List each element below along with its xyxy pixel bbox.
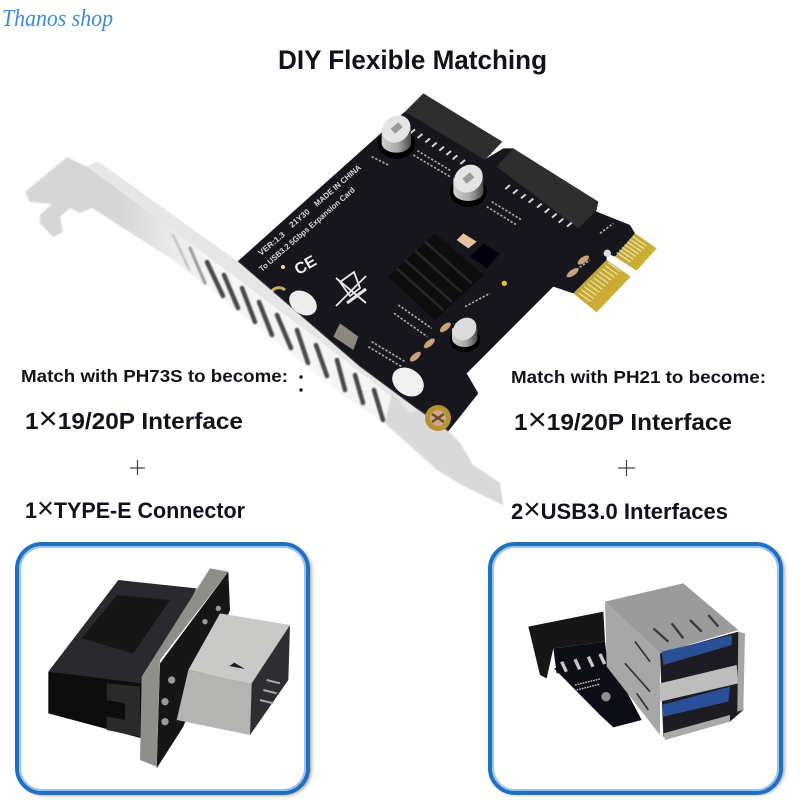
board silkscreen: [575, 679, 600, 690]
panel frame: [17, 544, 308, 793]
chip and gold component: [457, 233, 611, 286]
bracket folded top strip: [87, 162, 418, 413]
header connector 2: [497, 148, 598, 228]
housing front: [48, 672, 142, 738]
header pins: [562, 654, 605, 672]
cage top: [605, 583, 738, 653]
shell pins: [260, 680, 280, 703]
housing notch: [107, 683, 140, 737]
right line 2: 2×USB3.0 Interfaces: [511, 493, 728, 526]
board silkscreen text: MADE IN CHINA: [312, 163, 363, 209]
port front: [660, 632, 743, 737]
silkscreen pads: [368, 151, 613, 367]
bottom flange: [663, 715, 730, 740]
pin backing: [553, 642, 608, 673]
header housing: [528, 612, 605, 678]
expansion card product photo: [25, 93, 657, 505]
capacitor 3: [448, 313, 481, 352]
left line 1: 1×19/20P Interface: [25, 401, 243, 436]
panel inner highlight: [493, 547, 778, 790]
metal shell top: [188, 613, 290, 683]
board silkscreen text: 21Y30: [288, 207, 312, 230]
plate black face: [157, 572, 230, 768]
lower capacitors: [284, 285, 429, 402]
watermark: Thanos shop: Thanos shop: [2, 6, 113, 32]
header connector 1: [405, 93, 502, 164]
left column heading: Match with PH73S to become:: [21, 366, 288, 386]
shell opening: [250, 625, 290, 735]
right plus: [618, 460, 635, 476]
left plus: [130, 460, 145, 475]
board silkscreen text: VER:1.3: [257, 230, 287, 258]
middle silver bar: [660, 665, 738, 702]
right column heading: Match with PH21 to become:: [511, 367, 766, 387]
Type-E connector: [48, 568, 290, 768]
housing recess: [82, 595, 170, 653]
colon dots: [299, 375, 303, 392]
panel frame: [490, 544, 781, 793]
lower USB tongue: [662, 687, 730, 717]
metal shell front: [177, 670, 252, 735]
USB3.0 connector: [528, 583, 745, 740]
board silkscreen text: CE: [292, 253, 320, 279]
board silkscreen text: To USB3.2 5Gbps Expansion Card: [257, 185, 357, 274]
right line 1: 1×19/20P Interface: [514, 402, 732, 437]
upper USB tongue: [662, 635, 732, 665]
panel inner top shadow: [36, 548, 290, 552]
circuit board: [237, 93, 657, 433]
panel inner top shadow: [510, 548, 762, 552]
bracket tail: [385, 392, 503, 505]
cage spring clips: [653, 615, 718, 642]
capacitor 1: [377, 110, 416, 159]
gold fingers: long segment: [573, 260, 631, 312]
bracket body: [25, 157, 503, 505]
tan resistors: [408, 254, 591, 363]
PCB outline: [237, 112, 635, 433]
left line 2: 1×TYPE-E Connector: [25, 492, 245, 525]
panel: Type-E connector photo: [17, 544, 311, 795]
board hole: [601, 692, 611, 701]
grey inductor block: [333, 323, 358, 350]
arrow mark: [229, 663, 245, 669]
plate grey edge: [140, 568, 228, 767]
gold fingers: short segment: [615, 233, 657, 271]
cage side slots: [625, 642, 650, 710]
cage side: [605, 602, 660, 735]
metal bracket: [25, 157, 503, 505]
adapter board: [554, 653, 642, 727]
panel inner highlight: [20, 547, 305, 790]
panel shadow: [491, 545, 784, 794]
panel: dual USB3.0 connector photo: [490, 544, 784, 794]
capacitor 2: [448, 159, 488, 207]
right flange: [737, 632, 745, 712]
housing top: [48, 580, 197, 687]
title: DIY Flexible Matching: [278, 45, 547, 75]
heatsink: [388, 233, 483, 320]
screw: [425, 405, 451, 431]
solder points: [161, 606, 221, 725]
panel shadow: [18, 545, 311, 795]
icon: crossed-out bin: [336, 272, 366, 306]
ventilation slots: [173, 235, 383, 420]
gold screw ring: [270, 288, 285, 296]
